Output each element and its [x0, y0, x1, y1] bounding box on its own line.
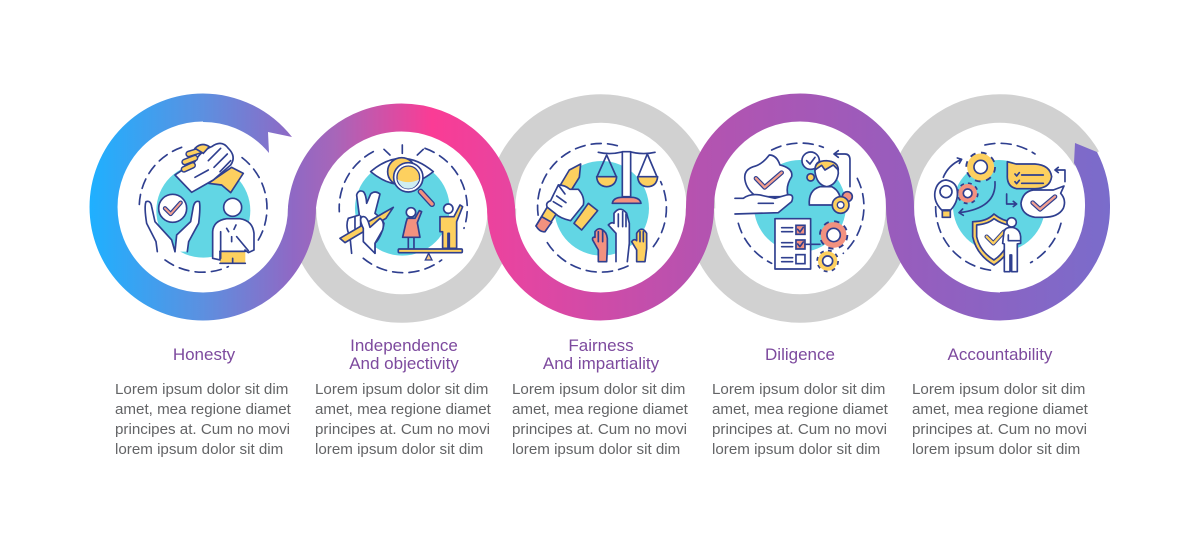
pencil [340, 207, 393, 243]
text block: accountability: amet, mea regione diamet [912, 401, 1089, 418]
text block: fairness: Lorem ipsum dolor sit dim [512, 381, 685, 398]
seesaw [398, 249, 462, 253]
right hand [175, 201, 200, 252]
column: independence [315, 336, 492, 458]
heading: fairness: And impartiality [543, 354, 660, 373]
ribbon end notch [1000, 143, 1110, 320]
white hand [175, 143, 233, 192]
person with idea [809, 187, 841, 205]
text block: accountability: Lorem ipsum dolor sit dim [912, 381, 1085, 398]
pencil [536, 164, 581, 232]
fold of fingers [361, 217, 383, 253]
text block: diligence: amet, mea regione diamet [712, 401, 889, 418]
heading: fairness: Fairness [568, 336, 634, 355]
yellow gear [819, 252, 837, 270]
yellow fingers [184, 145, 209, 169]
yellow sleeve [208, 167, 243, 193]
column: fairness [512, 336, 689, 458]
text block: honesty: lorem ipsum dolor sit dim [115, 441, 283, 458]
man [444, 204, 453, 213]
heading: independence: And objectivity [349, 354, 459, 373]
gradient ribbon [104, 94, 1110, 320]
star badge and hand [745, 155, 792, 197]
fist [547, 185, 584, 221]
text block: fairness: principes at. Cum no movi [512, 421, 687, 438]
light bulb [935, 180, 957, 210]
orange gear [959, 185, 976, 202]
small star gears [842, 192, 852, 202]
woman [406, 208, 416, 217]
shield [973, 214, 1013, 265]
arrows for bubbles [1055, 167, 1065, 182]
column: honesty [115, 345, 292, 458]
checklist [775, 219, 811, 269]
cuff [574, 203, 598, 230]
text block: diligence: Lorem ipsum dolor sit dim [712, 381, 885, 398]
column: accountability [912, 345, 1089, 458]
eye [371, 158, 433, 184]
icon: accountability [935, 143, 1065, 272]
orange gear [822, 223, 846, 247]
heading: honesty: Honesty [173, 345, 236, 364]
ribbon start arrow notch [203, 94, 292, 153]
icon: honesty [139, 143, 267, 272]
raised hands [593, 229, 607, 262]
column: diligence [712, 345, 889, 458]
person with crossed arms [1007, 218, 1016, 227]
icon: fairness [536, 143, 666, 272]
heading: diligence: Diligence [765, 345, 835, 364]
text block: independence: principes at. Cum no movi [315, 421, 490, 438]
peace hand [347, 191, 384, 253]
text block: fairness: amet, mea regione diamet [512, 401, 689, 418]
magnifier [421, 192, 432, 204]
white speech bubble [1021, 186, 1064, 217]
text block: independence: lorem ipsum dolor sit dim [315, 441, 483, 458]
circular arrows [943, 158, 962, 177]
arrow [834, 151, 850, 187]
icon: independence [339, 145, 467, 273]
left hand [145, 201, 175, 252]
yellow speech bubble [1007, 162, 1052, 189]
text block: accountability: principes at. Cum no movi [912, 421, 1087, 438]
text block: accountability: lorem ipsum dolor sit dim [912, 441, 1080, 458]
text block: fairness: lorem ipsum dolor sit dim [512, 441, 680, 458]
text block: diligence: principes at. Cum no movi [712, 421, 887, 438]
icon: diligence [735, 143, 864, 270]
text block: honesty: Lorem ipsum dolor sit dim [115, 381, 288, 398]
text block: honesty: principes at. Cum no movi [115, 421, 290, 438]
heading: independence: Independence [350, 336, 458, 355]
text block: diligence: lorem ipsum dolor sit dim [712, 441, 880, 458]
heading: accountability: Accountability [948, 345, 1053, 364]
text block: honesty: amet, mea regione diamet [115, 401, 292, 418]
top gear [968, 154, 993, 180]
person [224, 198, 242, 216]
text block: independence: Lorem ipsum dolor sit dim [315, 381, 488, 398]
check badge [159, 194, 187, 222]
scales [622, 152, 631, 197]
text block: independence: amet, mea regione diamet [315, 401, 492, 418]
gray ring backgrounds [302, 108, 1087, 308]
